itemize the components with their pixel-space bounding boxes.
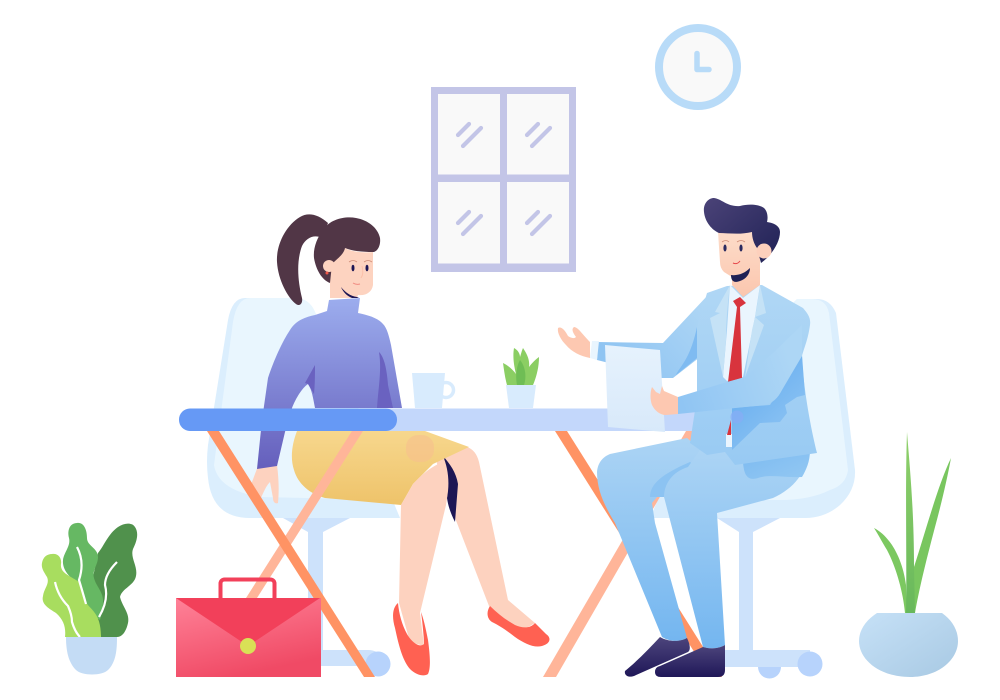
sweater [257,298,402,469]
man left leg [597,438,707,641]
shirt [723,285,760,381]
back sleeve [597,295,708,378]
suit stipple spot [730,410,744,424]
leg shadow [443,456,458,522]
potted grass plant [859,432,958,677]
suit dark panel [732,355,805,450]
ear [323,260,335,272]
right hand [650,386,678,415]
hair [314,217,380,283]
man front leg [664,450,807,648]
below jacket shade [743,450,810,479]
right table legs [543,431,722,677]
woman [247,214,549,675]
woman near shoe [393,603,430,675]
sweater shadows [305,352,393,408]
sleeve shade [676,327,697,375]
beard [731,268,750,282]
ponytail [277,214,328,305]
right sleeve [678,325,802,414]
table top light section [385,408,695,431]
cuff [590,341,599,360]
window [431,87,576,272]
jaw shadow [341,287,359,298]
man [558,198,817,677]
woman neck and face [330,248,373,298]
man eyes and mouth [722,240,745,264]
left table legs [207,431,375,677]
earring [326,272,328,274]
table top dark section [179,408,397,431]
woman hand [247,465,279,505]
left chair [207,298,400,676]
desk plant [503,348,539,408]
wall clock [659,28,737,106]
skirt [292,431,469,505]
suit torso [690,285,817,465]
hair tie [321,226,331,237]
man back shoe [625,637,690,677]
leafy potted plant [42,523,137,674]
man front shoe [655,645,725,677]
shirt bottom [726,434,732,447]
left hand gesture [558,327,590,358]
tie [727,297,746,435]
neck and face [718,232,760,297]
leg fold shade [650,462,700,497]
man hair [704,198,780,263]
right chair [650,299,855,678]
man ear [756,244,772,258]
woman far leg [436,447,535,632]
document [605,345,665,432]
lapels [710,285,766,377]
woman far shoe [488,606,549,647]
briefcase [176,580,321,677]
skirt hand mark [406,435,434,462]
coffee mug [412,373,454,408]
woman eyes and mouth [349,260,372,284]
woman near leg [399,462,448,646]
